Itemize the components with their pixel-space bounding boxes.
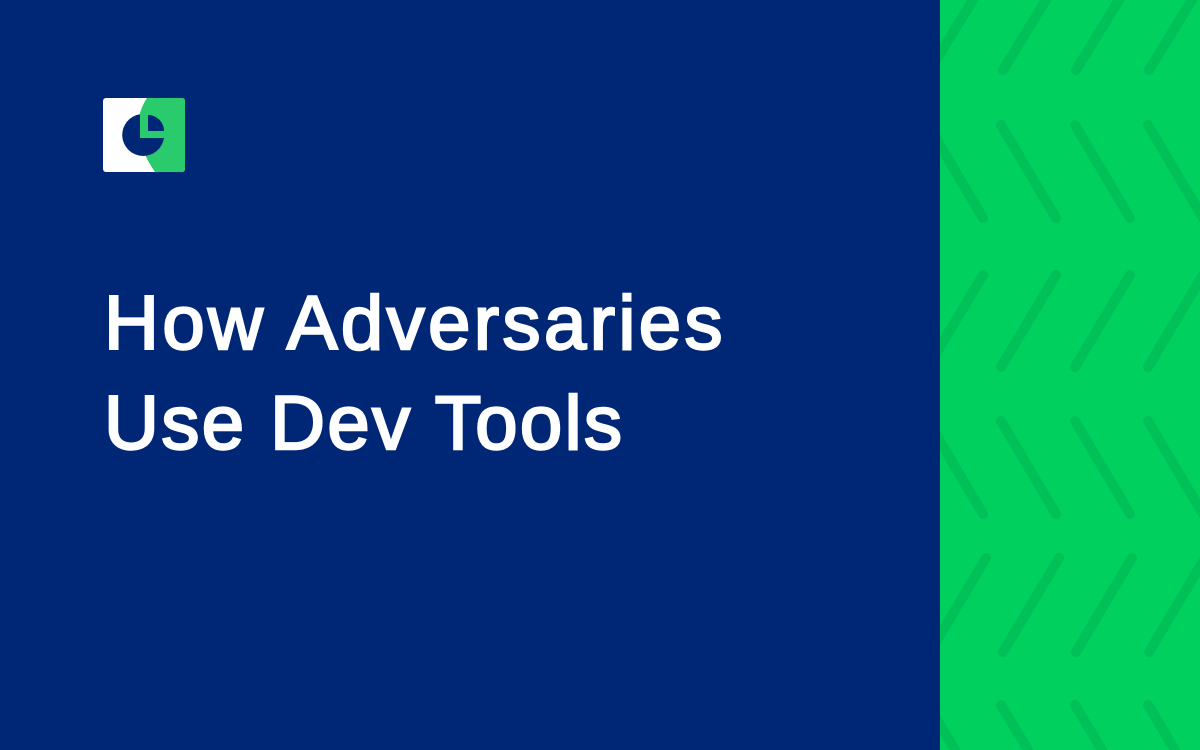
title [104,281,726,466]
title: Use Dev Tools [104,381,624,466]
panel: green patterned side band [940,0,1200,750]
title: How Adversaries [104,281,726,366]
icon: pie chart logo [103,98,185,172]
